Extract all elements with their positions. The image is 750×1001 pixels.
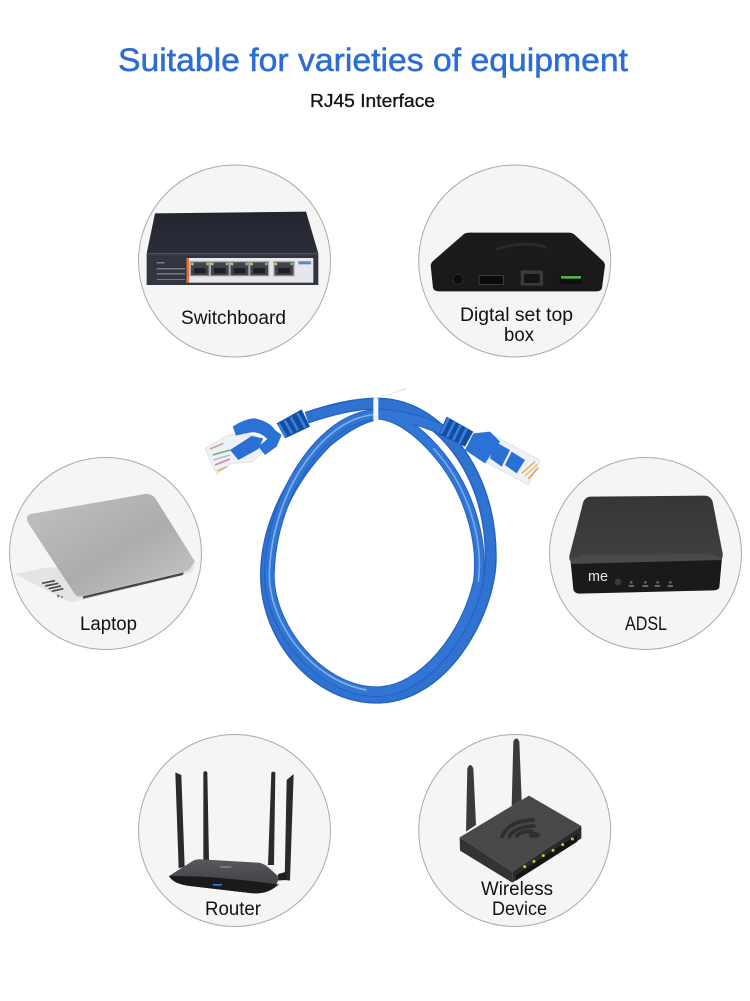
cable strand: outer <box>266 404 491 698</box>
label: box line two: box <box>504 325 534 346</box>
title: Suitable for varieties of equipment <box>118 42 628 78</box>
label: device: Device <box>492 899 547 920</box>
icon: set top box <box>431 233 605 291</box>
panel: wireless device <box>419 734 611 926</box>
panel: ADSL <box>550 458 742 650</box>
label: router: Router <box>205 899 262 920</box>
panel: laptop <box>10 458 202 650</box>
label: switchboard: Switchboard <box>181 308 286 329</box>
label: ADSL: ADSL <box>625 614 667 635</box>
cable <box>205 388 540 698</box>
cable tie <box>373 398 378 422</box>
panel: router <box>138 734 330 926</box>
icon: router <box>169 771 294 893</box>
icon: ADSL modem <box>569 496 723 594</box>
logo: me: me <box>588 568 608 585</box>
label: laptop: Laptop <box>80 614 137 635</box>
label: digital set top box: Digtal set top <box>460 305 573 326</box>
subtitle: RJ45 Interface <box>310 91 435 111</box>
panel: digital set top box <box>419 165 611 357</box>
panel: switchboard <box>138 165 330 357</box>
icon: network switch <box>147 212 318 285</box>
label: wireless: Wireless <box>481 879 553 900</box>
right plug <box>439 417 540 485</box>
icon: wireless router <box>460 738 581 883</box>
left plug <box>205 409 310 474</box>
cable strand: inner <box>269 414 479 692</box>
icon: laptop <box>15 494 195 602</box>
